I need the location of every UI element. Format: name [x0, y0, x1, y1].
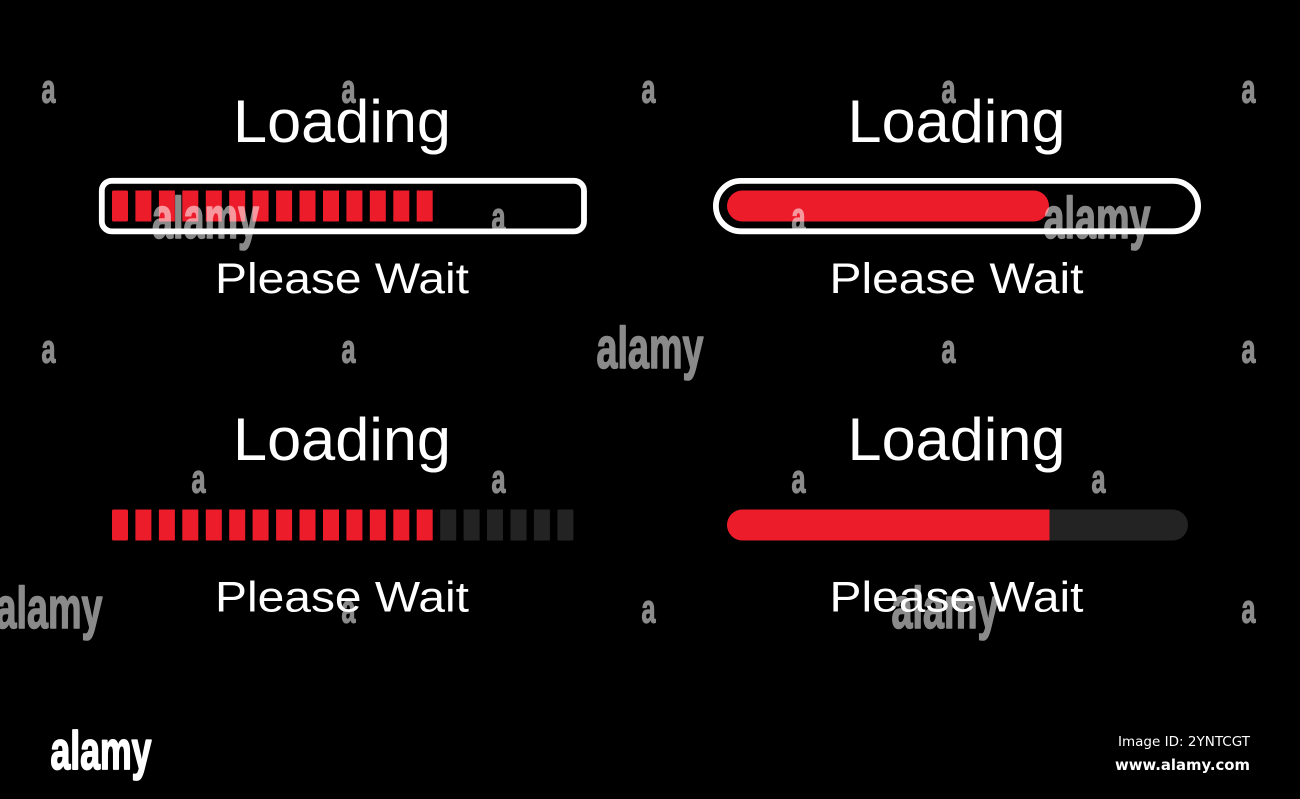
watermark overlay: alamy — [0, 576, 102, 641]
panel: segmented bar in outline frame — [102, 88, 584, 303]
watermark overlay: a — [342, 68, 356, 112]
watermark overlay: alamy — [1044, 186, 1150, 251]
watermark overlay: a — [42, 328, 56, 372]
watermark overlay: a — [1092, 458, 1106, 502]
dark remaining segments — [440, 510, 573, 540]
footer image id and website — [1115, 734, 1251, 774]
watermark overlay: a — [192, 458, 206, 502]
watermark overlay: alamy — [596, 316, 704, 381]
footer image id and website: Image ID: 2YNTCGT — [1118, 734, 1251, 750]
caption: Please Wait: Please Wait — [830, 255, 1084, 303]
caption: Please Wait: Please Wait — [830, 574, 1084, 622]
panel: smooth bar in pill frame — [716, 88, 1198, 303]
progress frame — [102, 181, 584, 231]
watermark overlay: a — [492, 196, 506, 240]
heading: Loading: Loading — [848, 406, 1066, 473]
pill progress frame — [716, 181, 1198, 231]
watermark overlay: a — [642, 588, 656, 632]
footer image id and website: www.alamy.com — [1115, 756, 1250, 774]
watermark overlay: alamy — [152, 186, 259, 251]
watermark overlay: a — [942, 68, 956, 112]
watermark overlay: alamy — [892, 576, 998, 641]
panel: smooth bar with dark track — [727, 406, 1188, 622]
red progress fill — [727, 190, 1049, 222]
watermark overlay: a — [642, 68, 656, 112]
red progress fill — [727, 510, 1050, 540]
watermark overlay: a — [1242, 588, 1256, 632]
watermark overlay: a — [942, 328, 956, 372]
watermark overlay: a — [792, 458, 806, 502]
watermark overlay — [0, 68, 1256, 641]
watermark overlay: a — [1242, 328, 1256, 372]
watermark overlay: a — [342, 328, 356, 372]
watermark overlay: a — [342, 588, 356, 632]
panel: segmented bar without frame — [112, 406, 573, 622]
watermark overlay: a — [792, 196, 806, 240]
dark progress track — [727, 510, 1188, 540]
heading: Loading: Loading — [848, 88, 1066, 155]
heading: Loading: Loading — [233, 88, 451, 155]
red progress segments — [112, 510, 433, 540]
watermark overlay: a — [492, 458, 506, 502]
red progress segments — [112, 190, 433, 222]
watermark overlay: a — [1242, 68, 1256, 112]
caption: Please Wait: Please Wait — [215, 255, 469, 303]
heading: Loading: Loading — [233, 406, 451, 473]
watermark overlay: a — [42, 68, 56, 112]
caption: Please Wait: Please Wait — [215, 574, 469, 622]
footer logo: alamy: alamy — [50, 721, 152, 781]
